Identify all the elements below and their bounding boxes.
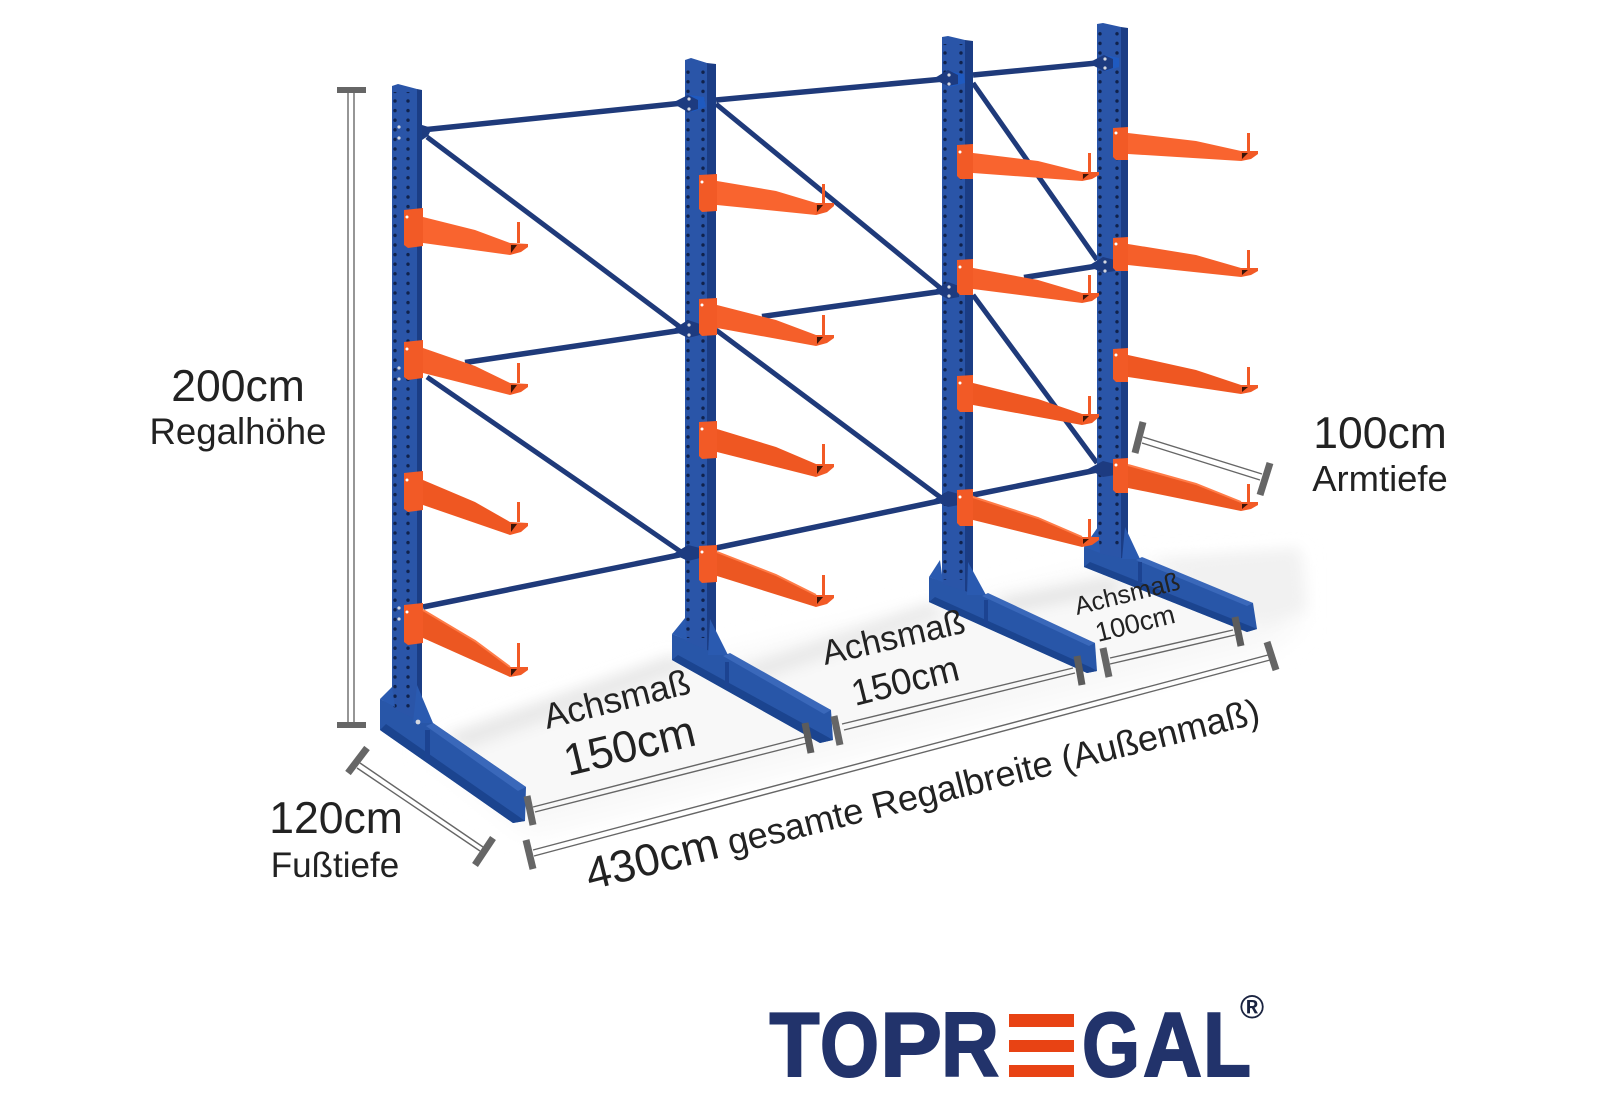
arms: upright 2 — [699, 174, 834, 607]
rods: middle row — [465, 266, 1097, 362]
label: 100cm: 100cm — [1313, 409, 1447, 458]
registered mark: ® — [1240, 988, 1264, 1025]
dimension: axis 150cm first bay — [527, 662, 811, 825]
logo: TOPREGAL — [770, 988, 1264, 1096]
arms: upright 1 — [404, 208, 528, 677]
label: 100cm: 100cm — [1092, 599, 1178, 648]
label: 200cm: 200cm — [171, 362, 305, 411]
label: 150cm: 150cm — [847, 647, 963, 714]
logo E bars — [1009, 1014, 1074, 1077]
label: Fußtiefe: Fußtiefe — [271, 846, 399, 885]
arms: upright 3 — [957, 144, 1099, 547]
label: 150cm: 150cm — [559, 707, 700, 786]
label: Achsmaß: Achsmaß — [818, 603, 969, 673]
floor shadows — [425, 548, 1305, 835]
label: 120cm: 120cm — [269, 794, 403, 843]
rod connection plates — [422, 55, 1119, 561]
label: Achsmaß: Achsmaß — [1072, 568, 1183, 621]
rods: diagonals — [427, 83, 1097, 554]
arms: upright 4 — [1113, 127, 1258, 511]
rods: top row — [422, 63, 1097, 130]
dimension: shelf height 200cm — [150, 87, 366, 728]
label: 430cm gesamte Regalbreite (Außenmaß): 430cm gesamte Regalbreite (Außenmaß) — [580, 683, 1264, 900]
dimension: foot depth 120cm — [269, 748, 493, 885]
upright 1 with foot — [380, 84, 526, 823]
upright 2 with foot — [672, 58, 833, 743]
logo letter R: R — [941, 995, 999, 1096]
logo letter A: A — [1143, 995, 1202, 1096]
label: Regalhöhe: Regalhöhe — [150, 411, 326, 452]
logo letter T: T — [770, 995, 820, 1096]
rods: lower row — [423, 470, 1097, 607]
logo letter G: G — [1082, 995, 1140, 1096]
dimension: arm depth 100cm — [1135, 409, 1448, 499]
upright 4 with foot — [1084, 23, 1257, 632]
label: Armtiefe: Armtiefe — [1312, 458, 1448, 499]
dimension: total width 430cm — [526, 642, 1276, 900]
label: Achsmaß: Achsmaß — [539, 662, 694, 737]
bracing rods — [422, 63, 1097, 607]
logo letter O: O — [820, 995, 879, 1096]
dimension: axis 100cm third bay — [1072, 568, 1241, 677]
logo letter P: P — [880, 995, 942, 1096]
upright 3 with foot — [929, 36, 1097, 673]
logo letter L: L — [1203, 995, 1251, 1096]
dimension: axis 150cm second bay — [818, 603, 1082, 745]
